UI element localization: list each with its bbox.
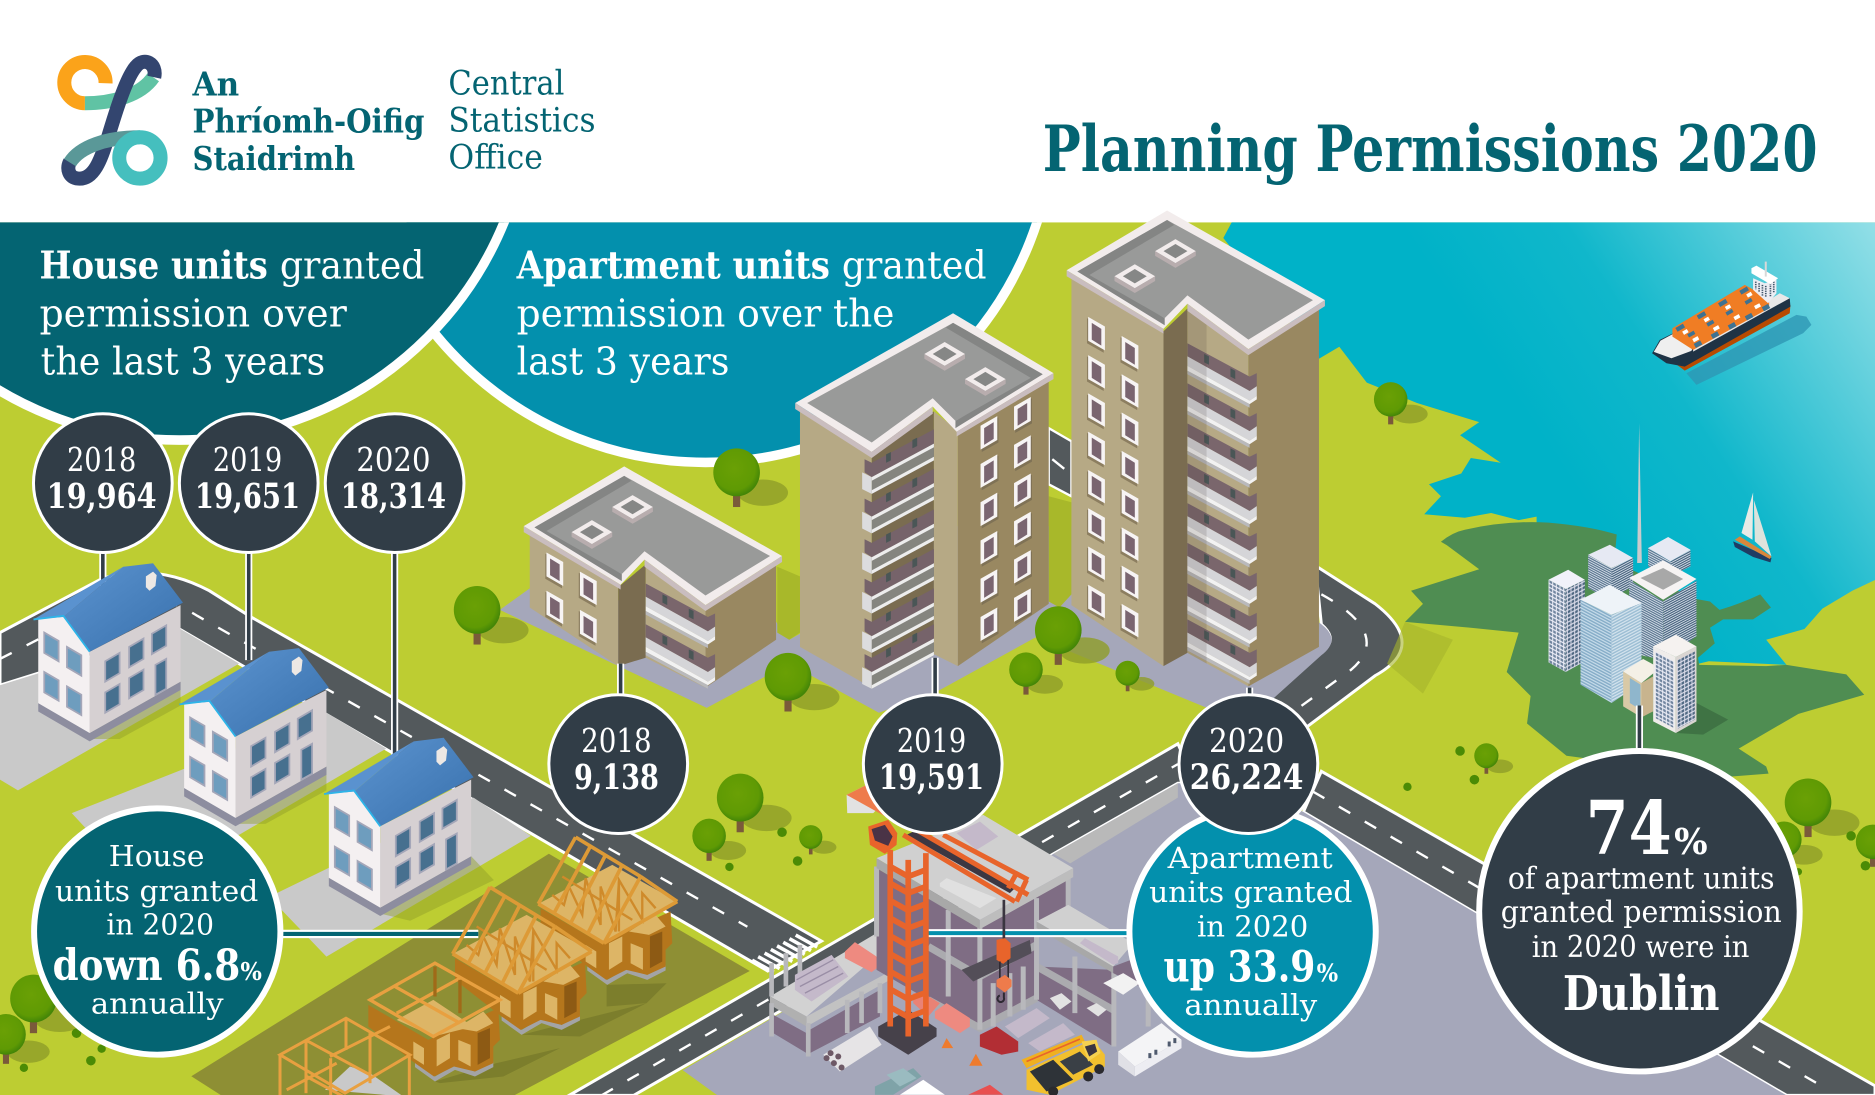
heading: house units: the last 3 years: [41, 339, 325, 384]
circle: apartments 2020: 2020: [1209, 722, 1284, 760]
left block tower: [1549, 570, 1585, 672]
callout: Dublin share: [1479, 751, 1800, 1071]
callout: apartment units annual change: up 33.9: [1164, 943, 1315, 993]
road: houses street: [0, 573, 822, 971]
heading: house units: granted: [280, 244, 425, 289]
circle: houses 2018: 2018: [67, 441, 136, 479]
map: Dublin region dark green: [1405, 522, 1864, 777]
logo text: English: Statistics: [448, 101, 596, 140]
crane: [847, 785, 1028, 1055]
callout: house units annual change: in 2020: [106, 908, 214, 942]
panel: apartment units: [406, 222, 1042, 468]
callout: apartment units annual change: %: [1317, 960, 1338, 988]
logo text: Irish: Staidrimh: [193, 140, 355, 178]
pad: apartment buildings ground: [500, 526, 1332, 720]
callout: Dublin share: 74: [1586, 785, 1672, 872]
heading: house units: permission over: [39, 291, 347, 336]
connector: apartment units line: [928, 921, 1130, 945]
logo mark: [64, 62, 161, 179]
circle: apartments 2018: 2018: [581, 722, 652, 760]
callout: house units annual change: annually: [91, 986, 224, 1020]
apartment building 2019: [795, 313, 1053, 689]
main building: [877, 815, 1148, 1046]
stems: apartment circles and Dublin: [621, 658, 1639, 756]
circle: houses 2020: 18,314: [341, 476, 446, 517]
logo text: English: [448, 63, 596, 177]
callout: Dublin share: %: [1674, 821, 1708, 863]
circle: apartments 2020: [1179, 695, 1318, 833]
plaza: construction ground: [683, 783, 1787, 1095]
circle: apartments 2020: 26,224: [1190, 757, 1303, 798]
apartment building 2020: [1067, 210, 1325, 686]
hook: [997, 900, 1012, 1002]
dark stripe tower: [1629, 560, 1696, 660]
circle: houses 2019: 2019: [213, 441, 282, 479]
heading: apartment units: permission over the: [517, 291, 894, 336]
road: short piece between towers: [1049, 428, 1071, 496]
logo text: Irish: [192, 66, 425, 178]
circle: houses 2018: [33, 414, 172, 552]
callout: house units annual change: House: [109, 839, 204, 873]
timber house B: [453, 887, 592, 1035]
road: diagonal to construction site: [569, 744, 1196, 1095]
sailboat: [1733, 492, 1771, 562]
materials: bricks, pipes, barrels, cones: [823, 993, 1075, 1071]
circle: apartments 2018: 9,138: [574, 757, 659, 798]
callout: house units annual change: %: [240, 958, 262, 986]
logo text: English: Central: [448, 63, 564, 102]
logo text: Irish: Phríomh-Oifig: [193, 103, 425, 141]
car and van: [875, 1068, 1003, 1095]
circle: apartments 2019: 2019: [897, 722, 966, 760]
circle: apartments 2018: [549, 695, 688, 833]
road: curve behind tower: [1256, 566, 1453, 729]
callout: apartment units annual change: Apartment: [1167, 841, 1333, 875]
timber frame C: [368, 963, 500, 1082]
callout: Dublin share: in 2020 were in: [1532, 930, 1749, 965]
callout: house units annual change: units granted: [55, 874, 258, 908]
circle: houses 2018: 19,964: [47, 476, 157, 517]
circle: houses 2020: [325, 414, 464, 552]
sea: [1223, 222, 1875, 670]
house 3: [324, 738, 494, 921]
callout: apartment units annual change: [1129, 808, 1376, 1055]
road: right diagonal: [1303, 771, 1875, 1095]
circle: houses 2020: 2020: [356, 441, 430, 479]
callout: Dublin share: Dublin: [1563, 966, 1720, 1022]
low block: [770, 933, 892, 1056]
timber site ground: [191, 854, 750, 1095]
logo text: English: Office: [448, 138, 543, 177]
callout: house units annual change: down 6.8: [53, 941, 240, 991]
blue centre tower: [1581, 585, 1641, 703]
heading: house units: [39, 244, 425, 384]
panel: house units: [0, 222, 510, 445]
timber house A: [538, 837, 677, 985]
heading: house units: House units: [39, 244, 268, 289]
callout: apartment units annual change: in 2020: [1197, 909, 1308, 943]
timber houses under construction: [280, 837, 677, 1095]
callout: Dublin share: granted permission: [1501, 895, 1782, 930]
crane truck: [1022, 1035, 1105, 1095]
back left tower: [1588, 545, 1633, 601]
container ship: [1652, 262, 1811, 385]
callout: apartment units annual change: units granted: [1149, 875, 1352, 909]
construction site: [770, 785, 1182, 1095]
logo text: Irish: An: [192, 66, 239, 104]
site cabin: [1118, 1023, 1182, 1076]
shaded grass between buildings: [777, 496, 1071, 640]
heading: apartment units: granted: [842, 244, 987, 289]
stems: house year circles to houses: [103, 544, 395, 756]
small tan building: [1623, 659, 1660, 717]
connector: house units line: [275, 930, 478, 937]
back right tower: [1648, 537, 1690, 576]
house 1: [33, 563, 183, 741]
crosswalk: [752, 935, 817, 972]
trees: [0, 382, 1875, 1072]
circle: houses 2019: [179, 414, 318, 552]
heading: apartment units: [516, 244, 987, 384]
callout: Dublin share: of apartment units: [1508, 861, 1775, 896]
heading: apartment units: Apartment units: [516, 244, 830, 289]
timber frame D: [280, 1018, 410, 1095]
circle: houses 2019: 19,651: [195, 476, 300, 517]
apartment building 2018: [524, 466, 782, 689]
house 2: [179, 648, 329, 826]
circle: apartments 2019: 19,591: [879, 757, 984, 798]
Dublin skyline: [1549, 423, 1771, 735]
house plots: [0, 629, 531, 957]
callout: apartment units annual change: annually: [1184, 988, 1318, 1022]
callout: house units annual change: [34, 808, 280, 1055]
heading: apartment units: last 3 years: [517, 339, 729, 384]
front right tower: [1653, 635, 1696, 733]
circle: apartments 2019: [863, 695, 1002, 833]
